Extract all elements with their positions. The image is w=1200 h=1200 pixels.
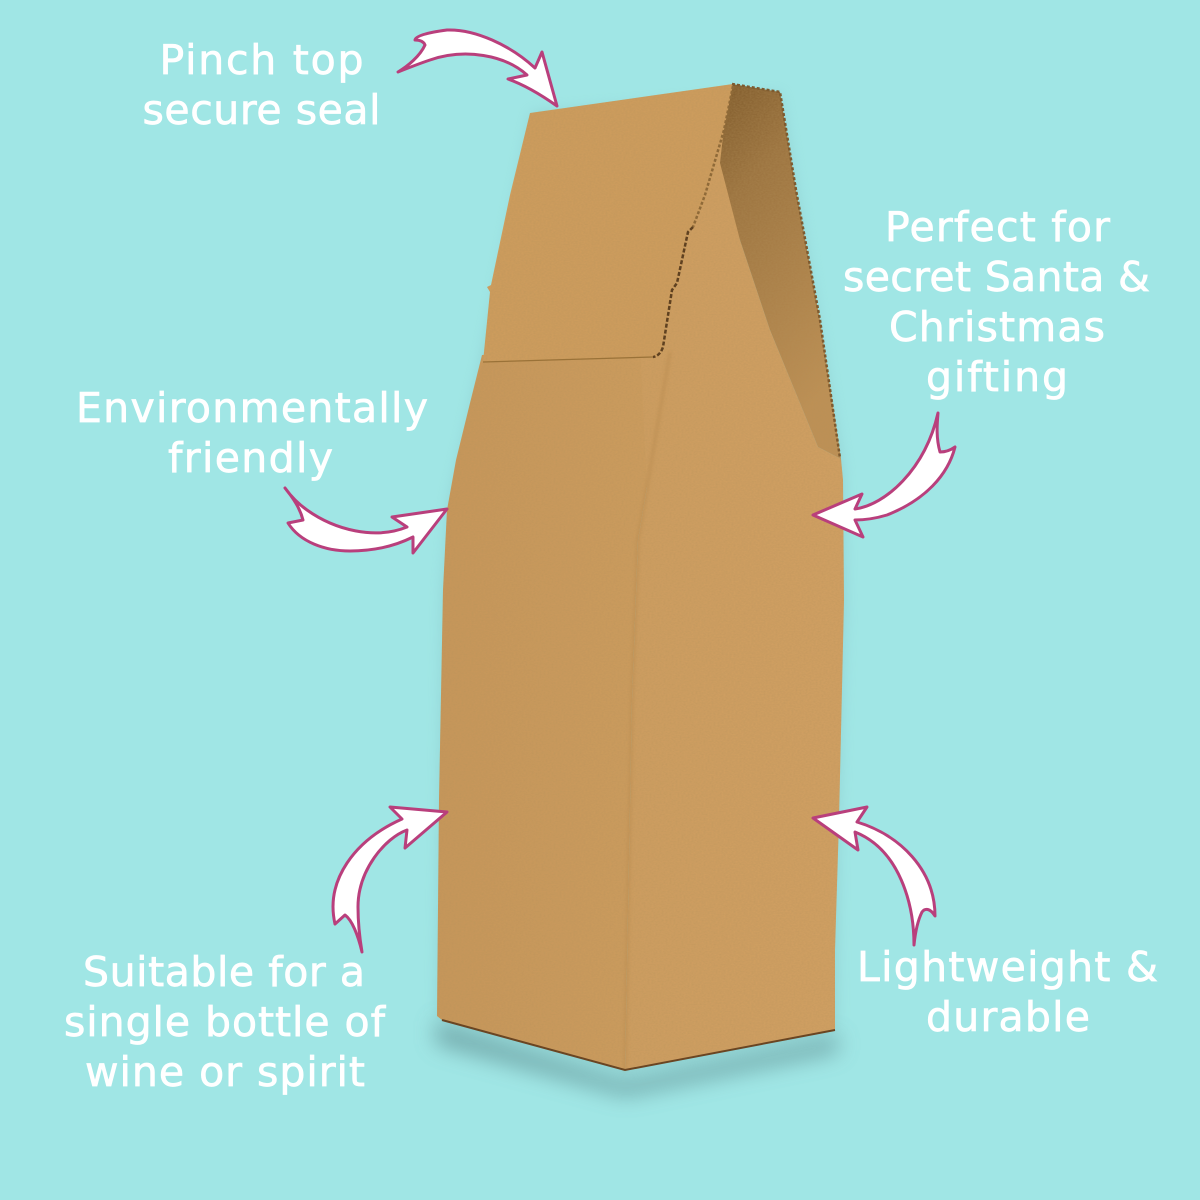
corrugated gusset edge [732,84,840,458]
label: perfect for secret santa and christmas gifting: Perfect for [885,203,1110,251]
product: cardboard wine box [436,84,845,1096]
arrow: pinch top [398,30,557,106]
label: lightweight and durable [857,943,1158,1041]
label: environmentally friendly: Environmentally [76,384,428,432]
label: lightweight and durable: durable [926,993,1090,1041]
corrugated bottom edge [442,1020,835,1070]
label: environmentally friendly [76,384,428,482]
label: pinch top secure seal: secure seal [142,86,380,134]
cardboard grain texture [437,84,844,1070]
arrow: suitable for a single bottle [333,807,447,952]
label: environmentally friendly: friendly [168,434,333,482]
label: suitable for a single bottle of wine or spirit: wine or spirit [85,1048,365,1096]
flap bottom edge [483,357,653,362]
arrow: christmas gifting [813,413,955,537]
label: perfect for secret santa and christmas gifting: gifting [926,353,1068,401]
corrugated flap edge lower [653,227,693,357]
box inner gusset [720,84,841,459]
label: suitable for a single bottle of wine or spirit: Suitable for a [83,948,365,996]
box left face [437,340,670,1070]
label: perfect for secret santa and christmas gifting: secret Santa & [843,253,1150,301]
arrow: lightweight and durable [813,807,935,945]
label: suitable for a single bottle of wine or spirit: single bottle of [64,998,387,1046]
label: pinch top secure seal: Pinch top [160,36,364,84]
box shadow [436,93,845,1096]
label: suitable for a single bottle of wine or spirit [64,948,387,1096]
label: perfect for secret santa and christmas gifting [843,203,1150,401]
label: lightweight and durable: Lightweight & [857,943,1158,991]
label: pinch top secure seal [142,36,380,134]
arrow: environmentally friendly [285,488,447,553]
label: perfect for secret santa and christmas gifting: Christmas [889,303,1105,351]
fold crease [625,352,670,1070]
box right face [625,130,844,1070]
corrugated flap edge upper [693,86,733,227]
box top flap [483,84,733,362]
